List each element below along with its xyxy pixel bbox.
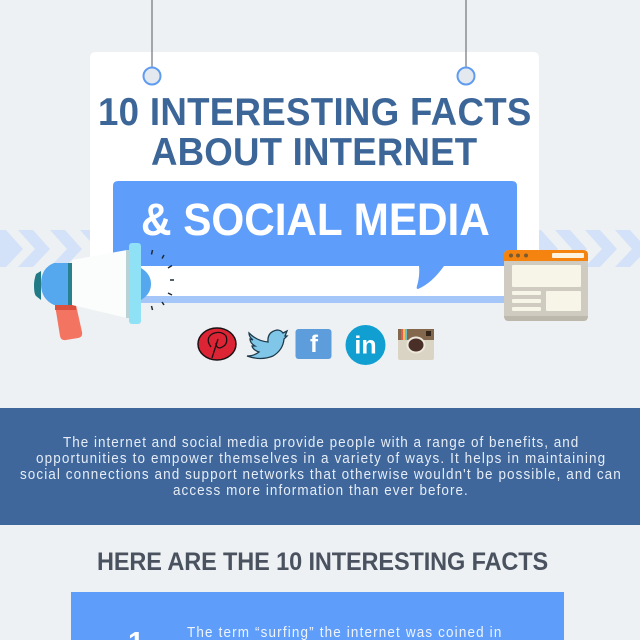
fact text: The term “surfing” the internet was coined in <box>187 624 501 640</box>
icon: linkedin: in <box>354 332 377 360</box>
social icons <box>198 325 434 365</box>
intro text <box>20 434 621 498</box>
white title card <box>90 52 539 296</box>
speech bubble heading <box>113 181 517 289</box>
icon: pinterest <box>198 328 236 360</box>
icon: facebook <box>296 329 332 359</box>
card hanger rings <box>144 68 474 84</box>
title <box>98 91 531 174</box>
icon: linkedin <box>346 325 386 365</box>
intro text: opportunities to empower themselves in a variety of ways. It helps in maintaining <box>36 450 605 466</box>
icon: instagram <box>398 329 434 360</box>
title: 10 INTERESTING FACTS <box>98 91 531 134</box>
title: ABOUT INTERNET <box>151 131 477 174</box>
chevron band: left <box>0 230 97 267</box>
icon: twitter <box>247 330 287 358</box>
chevron band: right <box>539 230 640 267</box>
intro band <box>0 408 640 525</box>
intro text: The internet and social media provide people with a range of benefits, and <box>63 434 578 450</box>
sound lines <box>152 250 174 310</box>
intro text: access more information than ever before. <box>173 482 468 498</box>
icon: browser window <box>504 250 588 321</box>
intro text: social connections and support networks that otherwise wouldn't be possible, and can <box>20 466 621 482</box>
fact card 1 <box>71 592 564 640</box>
icon: megaphone <box>34 243 174 340</box>
section heading: HERE ARE THE 10 INTERESTING FACTS <box>97 548 548 576</box>
hanging strings <box>152 0 466 68</box>
icon: facebook: f <box>310 331 319 358</box>
speech bubble heading: & SOCIAL MEDIA <box>141 195 490 245</box>
underline bar <box>141 296 506 303</box>
